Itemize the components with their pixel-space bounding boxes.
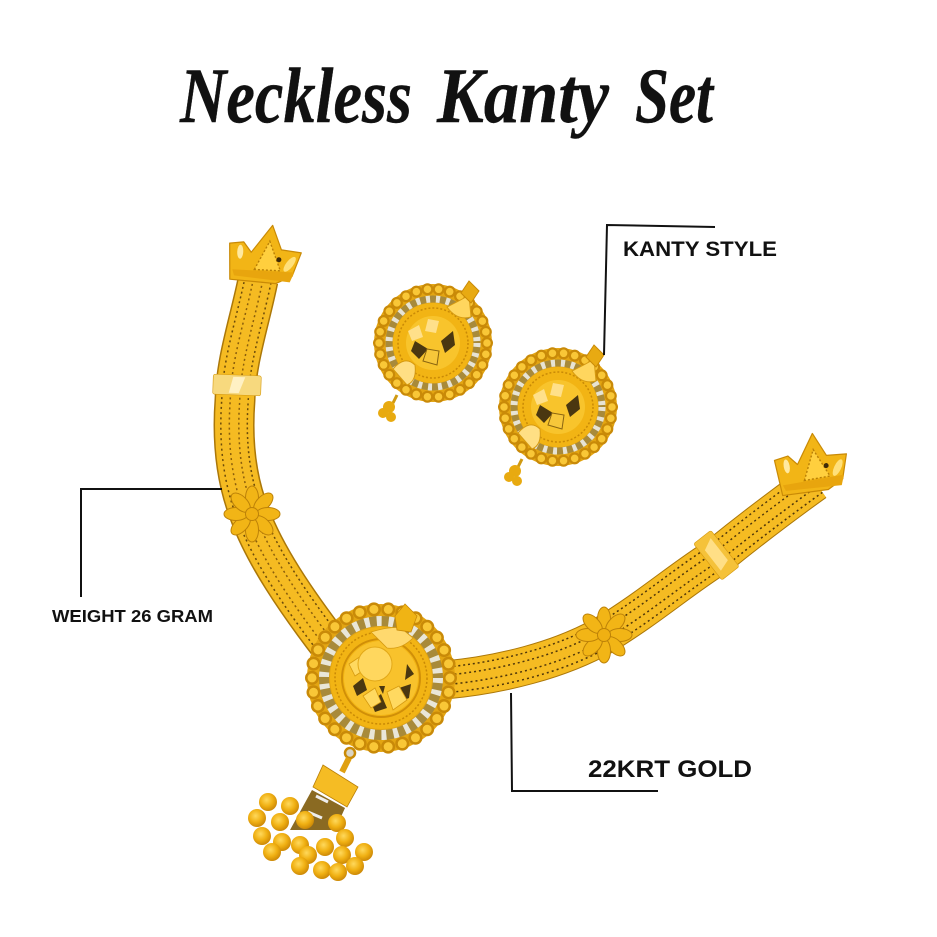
label: gold purity: 22KRT GOLD [588,756,752,783]
right earring [499,345,617,486]
label: kanty style: KANTY STYLE [623,237,777,261]
leader line: gold purity [511,693,658,791]
leader line: weight [81,489,222,597]
title [179,52,715,139]
left flower [224,486,280,542]
necklace right strand [445,482,815,680]
necklace left strand [234,280,332,648]
title: Kanty [436,52,609,139]
left clip [213,374,261,396]
label: weight: WEIGHT 26 GRAM [52,606,213,626]
leader line: kanty style [604,225,715,355]
left finial [228,223,303,285]
right finial [771,428,852,498]
main medallion [307,604,455,752]
title: Neckless [179,52,412,139]
left earring [374,281,492,422]
right clip [694,530,739,580]
right flower [576,607,632,663]
title: Set [635,52,715,139]
tassel [248,748,373,881]
